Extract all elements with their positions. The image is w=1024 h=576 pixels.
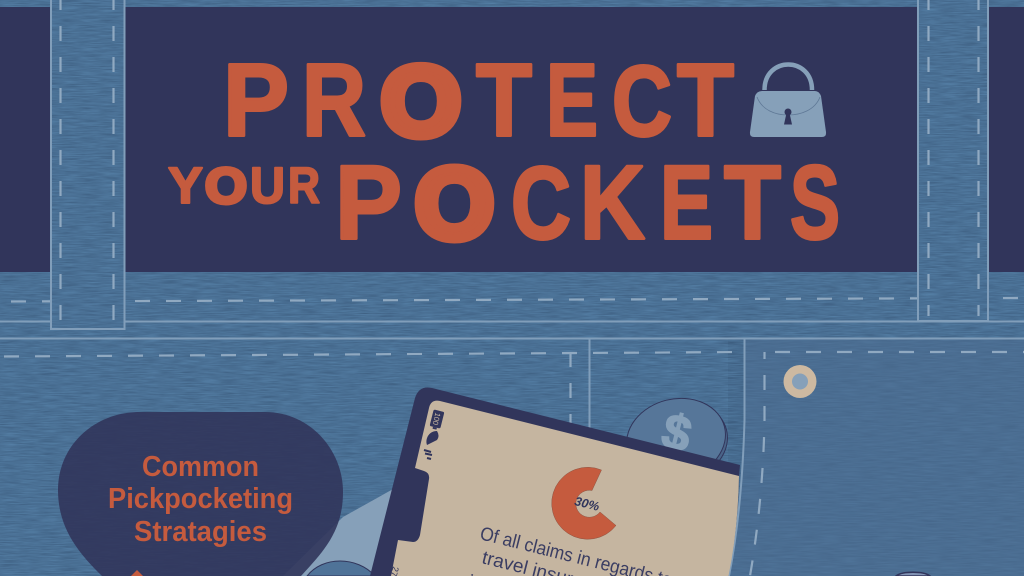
- title: P: [335, 144, 402, 262]
- title: C: [612, 46, 672, 158]
- bubble heading: Pickpocketing: [108, 483, 293, 515]
- bubble heading: Common: [142, 451, 259, 483]
- icon: wifi: [426, 431, 438, 445]
- title: O: [381, 46, 461, 156]
- icon: orange diamond: [131, 570, 143, 576]
- title: E: [546, 42, 598, 158]
- donut chart: 30%: [552, 467, 616, 539]
- title: R: [288, 157, 320, 214]
- title: P: [223, 42, 289, 158]
- title: [168, 42, 840, 262]
- title: Y: [168, 157, 203, 214]
- coin with dollar sign: [618, 388, 736, 493]
- left belt loop: [51, 0, 124, 329]
- title: T: [677, 42, 734, 158]
- donut chart: 30%: 30%: [573, 494, 601, 514]
- coin with dollar sign: $: [656, 402, 697, 464]
- right belt loop: [918, 0, 988, 321]
- phone screen: [391, 401, 739, 576]
- rivet: [784, 365, 816, 398]
- pocket right panel: [728, 338, 1024, 576]
- title: C: [511, 146, 571, 260]
- title: T: [724, 144, 781, 262]
- bubble heading: [108, 451, 293, 548]
- phone: [370, 387, 740, 576]
- phone body: [370, 387, 740, 576]
- icon: handbag with keyhole: [750, 64, 826, 137]
- coin in hand: [307, 561, 375, 576]
- navy waistband panel: [0, 7, 1024, 272]
- coin lower right: [896, 572, 930, 576]
- title: O: [415, 148, 494, 260]
- title: K: [580, 144, 645, 262]
- pocket seams and stitching: [570, 338, 1024, 576]
- icon: signal bars: [424, 450, 432, 459]
- speech bubble panel: [58, 412, 343, 576]
- waistband seams and stitching: [0, 298, 1024, 356]
- title: E: [660, 144, 713, 262]
- title: R: [302, 42, 366, 158]
- title: T: [476, 42, 532, 158]
- icon: battery: 100: [431, 412, 442, 426]
- icon: battery: [429, 409, 444, 431]
- bubble heading: Stratagies: [134, 516, 267, 548]
- title: O: [205, 158, 247, 214]
- title: U: [250, 157, 285, 214]
- title: S: [790, 144, 840, 262]
- hand shape behind phone: [283, 488, 400, 576]
